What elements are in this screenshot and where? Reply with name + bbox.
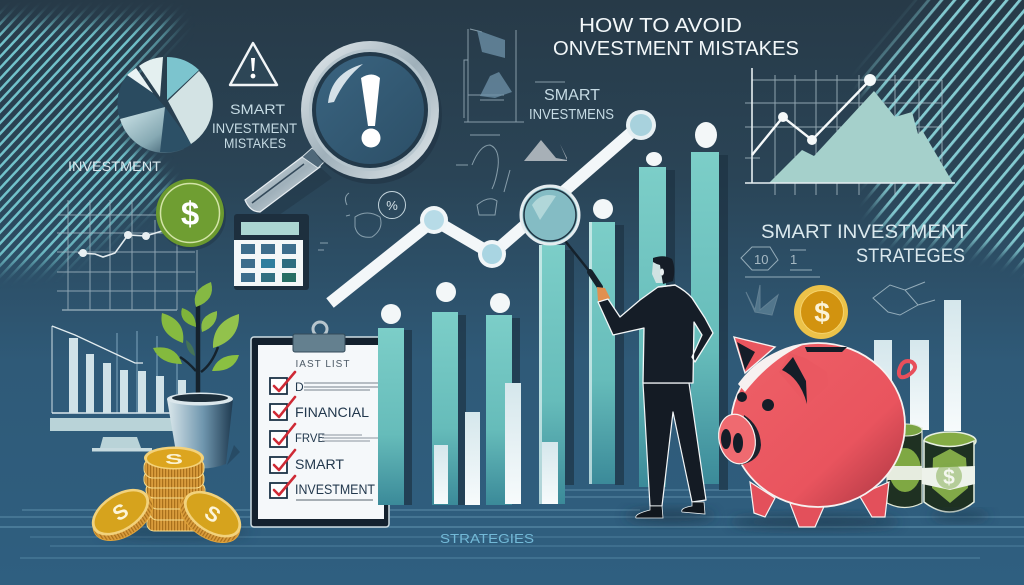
icon: warning triangle — [230, 43, 277, 85]
label: investment: INVESTMENT — [68, 158, 161, 174]
left diagonal hatching — [0, 9, 184, 278]
icon: gold coin stack — [83, 446, 250, 553]
label: strategies: STRATEGIES — [440, 531, 534, 546]
icon: gold coin above piggy bank: $ — [814, 297, 830, 328]
jacket — [598, 285, 713, 383]
icon: cash rolls: $ — [943, 466, 955, 489]
label: smart investments: SMART — [544, 87, 600, 104]
title: ONVESTMENT MISTAKES — [553, 38, 799, 60]
icon: small magnifying glass — [521, 186, 600, 287]
pig back ear — [734, 337, 775, 373]
sketch doodles: upper centre — [318, 29, 565, 250]
label: smart investment mistakes: SMART — [230, 101, 286, 117]
hand — [597, 287, 610, 303]
label: smart investment strategies — [761, 222, 968, 267]
doodle: mountain — [524, 140, 567, 161]
icon: large magnifying glass — [245, 41, 442, 220]
label: smart investments: INVESTMENS — [529, 106, 614, 123]
bar chart: teal and white bars — [378, 122, 728, 505]
title — [553, 15, 799, 60]
pig front ear — [779, 353, 828, 405]
checklist text — [295, 380, 383, 500]
doodle: building — [477, 30, 512, 98]
doodles: right sketch icons — [741, 247, 935, 315]
icon: gold coin above piggy bank — [794, 285, 848, 339]
pig legs — [750, 482, 889, 527]
chart: left grid line chart — [57, 200, 197, 310]
checklist text: SMART — [295, 456, 344, 472]
title: HOW TO AVOID — [579, 15, 742, 37]
trend line — [330, 110, 656, 303]
checklist text: D — [295, 380, 304, 394]
right pale bars — [874, 300, 961, 460]
doodle: percent: % — [386, 198, 398, 213]
doodles: right sketch icons: 10 — [754, 252, 768, 267]
icon: gold coin stack: S — [109, 499, 133, 526]
pig snout — [714, 411, 761, 467]
clipboard checklist — [251, 322, 389, 527]
ear — [660, 268, 664, 276]
checklist boxes — [270, 378, 287, 498]
collar — [658, 285, 675, 287]
clipboard clip — [293, 322, 345, 352]
label: smart investment strategies: SMART INVESTMENT — [761, 222, 968, 243]
checklist text: FRVE — [295, 431, 325, 445]
pig tail — [899, 361, 915, 377]
icon: green dollar badge: $ — [181, 195, 199, 232]
label: smart investment mistakes: INVESTMENT — [212, 120, 297, 136]
pig body — [731, 343, 905, 507]
icon: green dollar badge — [156, 179, 226, 250]
icon: monitor bar chart — [50, 326, 186, 452]
icon: gold coin stack: S — [165, 451, 183, 468]
label: smart investments — [529, 87, 614, 123]
checklist text: INVESTMENT — [295, 481, 375, 497]
doodle: percent — [378, 192, 406, 218]
checklist text: FINANCIAL — [295, 404, 369, 420]
checklist heading: IAST LIST — [296, 359, 350, 370]
chart: right area chart — [745, 68, 955, 195]
shoes — [636, 506, 663, 518]
legs — [643, 383, 706, 506]
pie chart — [117, 57, 213, 153]
hair and head — [653, 256, 674, 284]
face — [652, 262, 663, 283]
icon: piggy bank — [714, 337, 915, 528]
icon: cash rolls — [887, 424, 990, 520]
pig eyes — [737, 392, 747, 402]
icon: gold coin stack: S — [200, 501, 224, 528]
label: smart investment strategies: STRATEGES — [856, 246, 965, 267]
label: smart investment mistakes — [212, 101, 297, 151]
pig coin slot — [805, 347, 847, 352]
pig highlight — [738, 344, 805, 392]
right diagonal hatching — [858, 0, 1024, 271]
icon: potted plant — [153, 282, 240, 468]
icon: calculator — [234, 214, 309, 290]
red check marks — [274, 372, 295, 495]
doodles: right sketch icons: 1 — [790, 252, 797, 267]
floor lines — [0, 490, 1024, 558]
label: smart investment mistakes: MISTAKES — [224, 135, 286, 151]
person with magnifier — [597, 256, 715, 522]
